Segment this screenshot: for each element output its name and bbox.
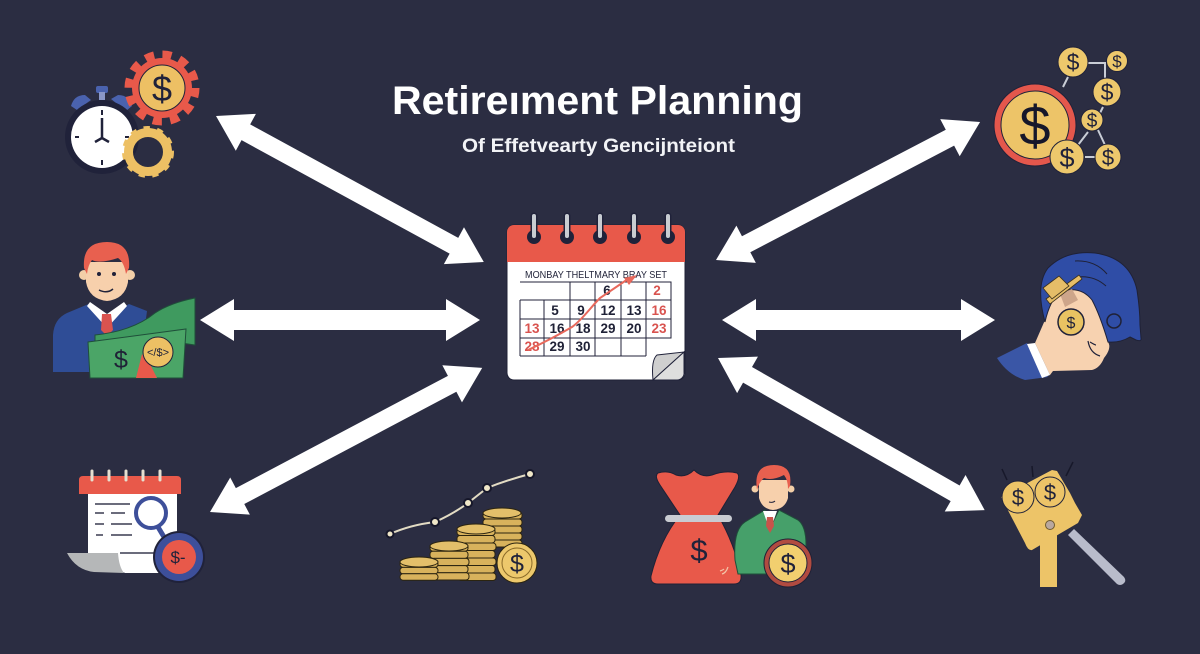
central calendar: 9: [577, 303, 585, 318]
icon: hammer with coins: $: [1044, 480, 1056, 505]
icon: head with helmet and coin: $: [1067, 315, 1076, 332]
arrow: top-right: [706, 103, 990, 279]
central calendar: 16: [549, 321, 565, 336]
icon: stopwatch and gears: [65, 55, 195, 175]
central calendar: 2: [653, 283, 661, 298]
icon: advisor with banknotes: $: [114, 346, 128, 374]
icon: money bag and person: [651, 465, 812, 587]
icon: head with helmet and coin: [997, 253, 1141, 380]
icon: money bag and person: $: [690, 533, 708, 568]
icon: coin network: $: [1101, 79, 1114, 105]
central calendar: 5: [551, 303, 559, 318]
central calendar: [507, 216, 685, 380]
central calendar: 13: [524, 321, 540, 336]
central calendar: 29: [600, 321, 616, 336]
icon: coin stacks with growth line: $: [510, 550, 524, 578]
arrow: top-left: [206, 98, 494, 280]
icon: coin network: $: [1112, 52, 1122, 71]
icon: coin network: [994, 47, 1128, 174]
icon: coin network: $: [1102, 145, 1114, 170]
central calendar: 18: [575, 321, 591, 336]
central calendar: 12: [600, 303, 616, 318]
icon: hammer with coins: $: [1012, 485, 1024, 510]
icon: hammer with coins: [1001, 462, 1125, 587]
central calendar: 23: [651, 321, 667, 336]
arrow: middle-right: [722, 299, 995, 341]
icon: coin stacks with growth line: [386, 470, 537, 583]
title: Retireıment Planning: [392, 79, 803, 123]
central calendar: MONBAY THELTMARY BRAY SET: [525, 269, 668, 281]
icon: calendar document with magnifier: [67, 471, 205, 583]
subtitle: Of Effetvearty Gencijnteiont: [462, 136, 736, 157]
icon: coin network: $: [1059, 143, 1075, 173]
central calendar: 28: [524, 339, 540, 354]
icon: coin network: $: [1019, 94, 1051, 157]
central calendar: 6: [603, 283, 611, 298]
central calendar: 13: [626, 303, 642, 318]
central calendar: 20: [626, 321, 642, 336]
icon: coin network: $: [1067, 49, 1080, 75]
icon: advisor with banknotes: </$>: [147, 347, 169, 359]
central calendar: 16: [651, 303, 667, 318]
icon: stopwatch and gears: $: [152, 68, 172, 109]
icon: coin network: $: [1087, 111, 1098, 132]
central calendar: 29: [549, 339, 565, 354]
arrow: bottom-left: [200, 349, 492, 531]
central calendar: 30: [575, 339, 591, 354]
icon: calendar document with magnifier: $-: [170, 548, 186, 567]
icon: advisor with banknotes: [53, 242, 195, 378]
arrow: bottom-right: [708, 340, 995, 528]
icon: money bag and person: $: [780, 549, 796, 579]
arrow: middle-left: [200, 299, 480, 341]
